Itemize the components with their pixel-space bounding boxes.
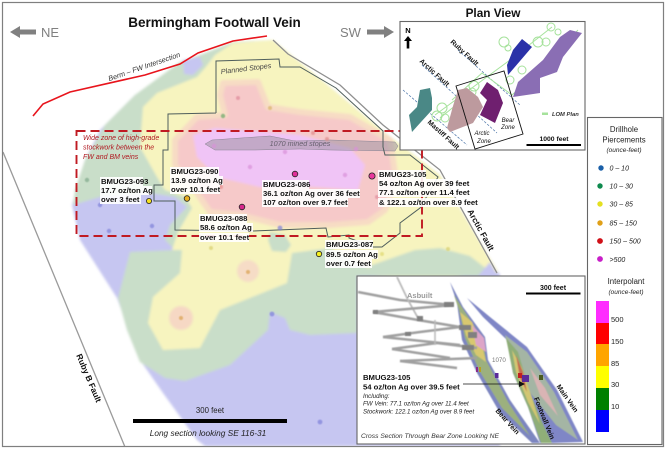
callout: BMUG23-105: 77.1 oz/ton over 11.4 feet	[379, 188, 470, 197]
callout: BMUG23-093	[100, 177, 153, 204]
legend: drillhole classes	[597, 165, 641, 264]
callout: BMUG23-086: BMUG23-086	[263, 180, 310, 189]
label: Arctic Fault: Arctic Fault	[465, 207, 497, 253]
callout: BMUG23-090: over 10.1 feet	[171, 185, 221, 194]
callout: BMUG23-087	[316, 240, 378, 268]
high-grade zone box: Wide zone of high-grade	[83, 135, 159, 142]
scale bar: long section: 300 feet	[196, 406, 225, 415]
callout: BMUG23-090: BMUG23-090	[171, 167, 218, 176]
berm intersection line: Berm – FW Intersection	[107, 50, 181, 83]
arrow: SW	[340, 25, 394, 40]
callout: BMUG23-088: BMUG23-088	[200, 214, 248, 223]
vein labels: Main Vein	[555, 384, 579, 414]
fault labels	[418, 39, 480, 152]
legend heading: interpolant: Interpolant	[608, 277, 645, 286]
heading: Plan View: Plan View	[466, 6, 521, 20]
callout: BMUG23-105: & 122.1 oz/ton over 8.9 feet	[379, 198, 478, 207]
label: 1070: 1070	[492, 357, 506, 364]
label: Asbuilt: Asbuilt	[407, 291, 433, 300]
1070 mined stopes: 1070 mined stopes	[270, 139, 331, 148]
callout: BMUG23-088	[199, 204, 253, 242]
caption: long section: Long section looking SE 116-31	[150, 428, 266, 438]
panel: plan view inset	[400, 22, 585, 152]
fault labels: Ruby Fault	[449, 39, 480, 68]
bear zone solid	[480, 82, 503, 123]
caption: cross section: Cross Section Through Bear Zone Looking NE	[361, 433, 499, 440]
callout: BMUG23-086: 107 oz/ton over 9.7 feet	[263, 198, 348, 207]
purple ore body	[513, 30, 582, 97]
fault labels: Mastiff Fault	[426, 119, 461, 152]
drill intercept markers	[476, 367, 543, 382]
1070 mined stopes	[205, 136, 398, 151]
as-built workings	[358, 277, 477, 368]
scale bar: plan view	[526, 136, 581, 146]
panel: cross section inset	[357, 276, 585, 444]
arrow: to intercept	[463, 381, 525, 387]
zone labels	[474, 118, 515, 145]
callout: BMUG23-105 cross section	[363, 373, 474, 416]
high-grade zone box: stockwork between the	[83, 144, 154, 152]
blue ore body	[507, 39, 532, 75]
legend: drillhole classes: 85 – 150	[610, 220, 637, 228]
scale bar: plan view: 1000 feet	[539, 136, 569, 143]
scale bar: cross section: 300 feet	[540, 285, 567, 292]
zone labels: Arctic	[474, 131, 490, 137]
legend: drillhole classes: 30 – 85	[610, 202, 633, 208]
callout: BMUG23-088: over 10.1 feet	[200, 233, 250, 242]
legend: drillhole classes: 150 – 500	[610, 238, 641, 246]
scale bar: cross section	[526, 285, 580, 294]
legend: interpolant colour bar: 500	[611, 315, 624, 324]
legend: interpolant colour bar: 85	[611, 359, 619, 368]
zone labels: Bear	[502, 118, 515, 124]
callout: BMUG23-090	[170, 167, 223, 201]
panel: legend	[588, 118, 662, 444]
berm intersection line	[33, 36, 267, 116]
title: Bermingham Footwall Vein	[128, 15, 301, 30]
mine plan workings	[432, 23, 578, 122]
teal ore body	[409, 88, 432, 132]
high-grade zone box	[76, 131, 422, 236]
zone labels: Zone	[476, 139, 491, 145]
legend: drillhole classes: >500	[610, 257, 625, 264]
callout: BMUG23-105 cross section: BMUG23-105	[363, 373, 411, 382]
vein labels: Footwall Vein	[532, 397, 555, 441]
callout: BMUG23-105 cross section: 54 oz/ton Ag over 39.5 feet	[363, 382, 460, 392]
footwall and main vein solids	[467, 298, 583, 443]
callout: BMUG23-093: BMUG23-093	[101, 177, 148, 186]
legend heading: drillhole piercements: Piercements	[602, 136, 646, 144]
callout: BMUG23-087: 89.5 oz/ton Ag	[326, 250, 378, 259]
callout: BMUG23-086	[262, 171, 360, 207]
label: Ruby B Fault: Ruby B Fault	[74, 352, 104, 404]
legend: interpolant colour bar	[596, 301, 624, 432]
icon: north arrow: N	[405, 26, 411, 35]
planned stopes outline	[154, 59, 438, 247]
scale bar: long section	[133, 406, 287, 423]
LOM plan key: LOM Plan	[552, 112, 579, 118]
legend heading: drillhole piercements: Drillhole	[610, 125, 638, 134]
zone labels: Zone	[500, 125, 515, 131]
arrow: SW: SW	[340, 25, 362, 40]
callout: BMUG23-105 cross section: Stockwork: 122.1 oz/ton Ag over 8.9 feet	[363, 408, 474, 416]
legend heading: drillhole piercements: (ounce-feet)	[606, 147, 642, 154]
callout: BMUG23-105: 54 oz/ton Ag over 39 feet	[379, 179, 470, 188]
legend: interpolant colour bar: 150	[611, 337, 624, 346]
zone boundary rectangle	[456, 71, 523, 149]
callout: BMUG23-088: 58.6 oz/ton Ag	[200, 223, 252, 232]
callout: BMUG23-105 cross section: Including:	[363, 393, 390, 400]
callout: BMUG23-087: over 0.7 feet	[326, 259, 371, 268]
fault labels: Arctic Fault	[418, 58, 451, 89]
arrow: NE: NE	[41, 25, 59, 40]
legend: drillhole classes: 0 – 10	[610, 166, 629, 172]
callout: BMUG23-093: over 3 feet	[101, 195, 140, 204]
legend heading: interpolant: (ounce-feet)	[608, 289, 644, 296]
long section contour map	[3, 40, 500, 447]
callout: BMUG23-093: 17.7 oz/ton Ag	[101, 186, 153, 195]
vein labels	[494, 384, 579, 441]
callout: BMUG23-087: BMUG23-087	[326, 240, 373, 249]
arctic fault trace	[273, 40, 497, 273]
planned stopes outline: Planned Stopes	[220, 61, 272, 76]
callout: BMUG23-090: 13.9 oz/ton Ag	[171, 176, 223, 185]
arrow: NE	[10, 25, 59, 40]
arctic zone solid	[447, 88, 483, 132]
ruby b fault trace	[3, 152, 125, 447]
callout: BMUG23-105: BMUG23-105	[379, 170, 427, 179]
vein labels: Bear Vein	[494, 408, 520, 436]
high-grade zone box: FW and BM veins	[83, 154, 139, 161]
bear vein solid	[450, 282, 540, 443]
callout: BMUG23-105	[369, 170, 478, 207]
callout: BMUG23-086: 36.1 oz/ton Ag over 36 feet	[263, 189, 360, 198]
icon: north arrow	[404, 26, 412, 48]
legend: drillhole classes: 10 – 30	[610, 184, 633, 190]
legend: interpolant colour bar: 30	[611, 380, 619, 389]
faded drillhole points	[85, 96, 450, 424]
fault dashed traces	[403, 50, 520, 145]
callout: BMUG23-105 cross section: FW Vein: 77.1 oz/ton Ag over 11.4 feet	[363, 400, 469, 408]
legend: interpolant colour bar: 10	[611, 402, 619, 411]
